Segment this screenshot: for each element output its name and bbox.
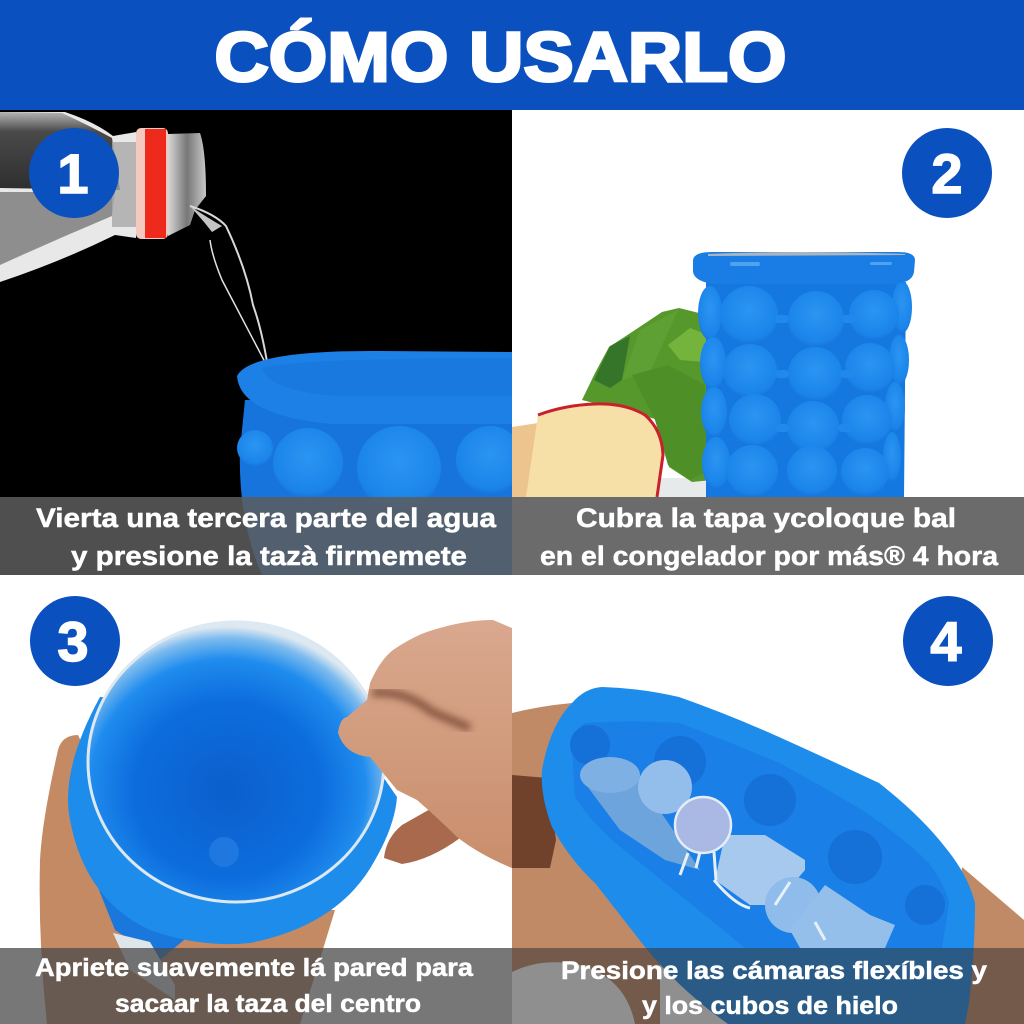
badge: step 3 (30, 596, 120, 686)
bottle pouring water (0, 112, 268, 368)
cheese wedge (512, 404, 663, 497)
badge: step 2: 2 (931, 142, 963, 205)
panel: step 1 pour water (0, 110, 524, 575)
ice cubes (580, 757, 895, 948)
header banner (0, 0, 1024, 110)
white object below caption (512, 962, 635, 1024)
caption: step 3 (0, 948, 512, 1024)
badge: step 4 (903, 596, 993, 686)
title: CÓMO USARLO (214, 18, 786, 96)
caption: step 2: en el congelador por más® 4 hora (540, 541, 999, 571)
badge: step 2 (902, 128, 992, 218)
panel: step 4 ice cubes (512, 575, 1024, 1024)
caption: step 1 (0, 497, 512, 575)
mold body (542, 687, 975, 1024)
panel: step 3 remove cup (0, 575, 512, 1024)
caption: step 4: Presione las cámaras flexíbles y (561, 957, 987, 985)
badge: step 1: 1 (57, 142, 89, 205)
silicone ice mold (693, 252, 915, 497)
caption: step 3: sacaar la taza del centro (115, 990, 421, 1018)
caption: step 4 (512, 948, 1024, 1024)
left hand (40, 735, 335, 1024)
panel: step 2 freeze (512, 110, 1024, 575)
caption: step 2 (512, 497, 1024, 575)
silicone mold in panel 1 (237, 351, 524, 575)
caption: step 1: y presione la tazà firmemete (71, 541, 467, 571)
badge: step 4: 4 (930, 610, 962, 673)
translucent cup (87, 621, 385, 903)
mold base (95, 880, 190, 1000)
broccoli (582, 308, 712, 482)
caption: step 1: Vierta una tercera parte del agua (36, 503, 497, 533)
mold cavity (572, 722, 949, 948)
right hand (338, 620, 512, 868)
caption: step 4: y los cubos de hielo (642, 992, 898, 1020)
badge: step 3: 3 (57, 610, 89, 673)
badge: step 1 (29, 128, 119, 218)
bowl under broccoli (650, 478, 725, 497)
mold outer ring (68, 697, 397, 944)
left hand (512, 703, 660, 1024)
caption: step 2: Cubra la tapa ycoloque bal (576, 503, 956, 533)
right hand (945, 867, 1024, 1024)
caption: step 3: Apriete suavemente lá pared para (35, 954, 474, 982)
